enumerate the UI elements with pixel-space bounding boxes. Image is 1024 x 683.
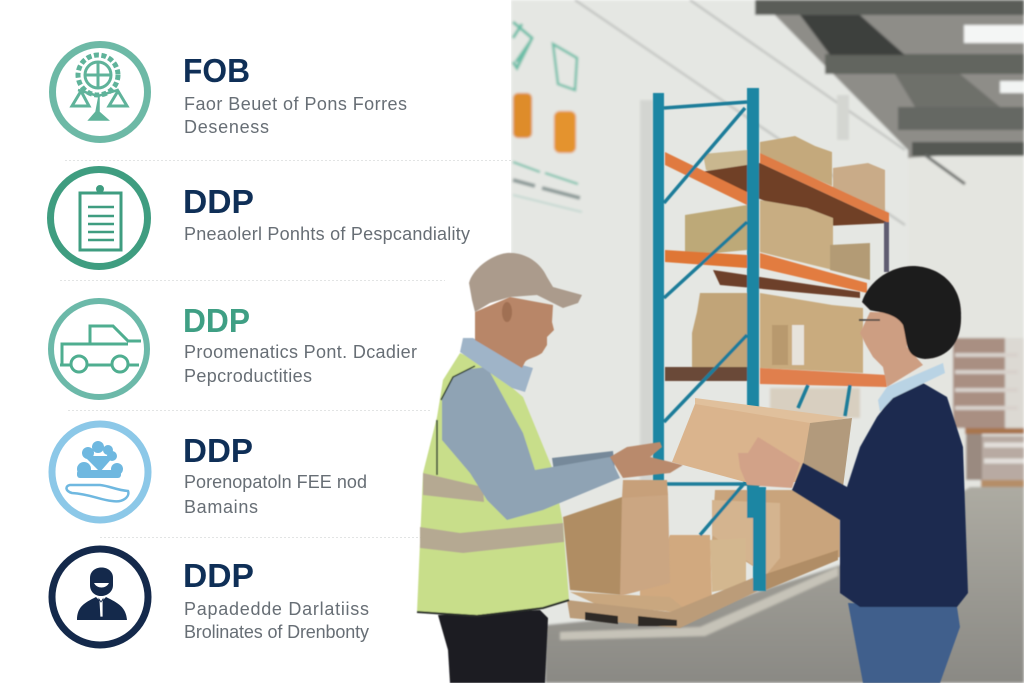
carton under arm [563,480,670,596]
lower shelf [665,367,887,387]
heading: DDP [183,183,254,220]
face and neck [860,312,923,387]
shirt collar [878,363,945,412]
shirt sleeve [442,367,620,520]
description: Proomenatics Pont. Dcadier [184,342,417,362]
description: Deseness [184,117,269,137]
row 4: DDP [52,424,367,520]
description: Faor Beuet of Pons Forres [184,94,407,114]
hair [862,266,961,359]
heading: DDP [183,557,254,594]
description: Porenopatoln FEE nod [184,472,367,492]
top shelf boxes [703,136,885,212]
rack uprights and braces [653,88,766,591]
middle shelf boxes [685,200,870,280]
lower shelf boxes [692,293,863,373]
icon: pickup truck [51,301,147,397]
icon: clipboard [50,170,148,266]
jeans [848,603,960,683]
description [184,94,407,137]
wooden pallets [567,550,838,628]
description: Pneaolerl Ponhts of Pespcandiality [184,224,470,244]
head and neck [475,297,554,368]
carton being handed over [672,398,852,487]
description: Brolinates of Drenbonty [184,622,369,642]
blurred goods behind the handed-over carton [770,388,860,418]
description: Bamains [184,497,258,517]
shirt collar [460,338,533,392]
dividers [60,160,511,538]
top shelf [665,152,889,226]
heading: DDP [183,302,250,339]
row 5: DDP [52,549,369,645]
icon: scales and gear [52,44,148,140]
baseball cap [469,253,582,312]
hand [738,437,800,488]
heading: FOB [183,52,250,89]
sweater [792,383,968,607]
warehouse photo background [511,0,1024,683]
icon: plant and path [52,424,148,520]
customer in navy sweater [738,266,968,683]
description: Pepcroductities [184,366,312,386]
vest strap edge [437,366,475,475]
hand [610,442,683,478]
ear [502,302,512,322]
reflective bands [420,473,564,553]
worker in safety vest [417,253,683,683]
description [184,599,369,642]
glasses [859,319,880,321]
pallet rack with boxes [567,88,889,628]
description [184,472,367,517]
far sleeve [552,451,615,478]
ceiling trusses [755,0,1024,184]
middle shelf [665,222,889,298]
safety vest [417,353,569,615]
row 2: DDP [50,170,470,266]
description: Papadedde Darlatiiss [184,599,369,619]
row 3: DDP [51,301,417,397]
row 1: FOB [52,44,407,140]
warehouse floor [545,487,1024,683]
wall poster [513,22,582,212]
icon: business person [52,549,148,645]
description [184,342,417,386]
heading: DDP [183,432,253,469]
trousers [438,610,548,683]
white left panel [0,0,511,683]
background pallets [953,338,1024,488]
stacked boxes on floor [570,490,850,613]
